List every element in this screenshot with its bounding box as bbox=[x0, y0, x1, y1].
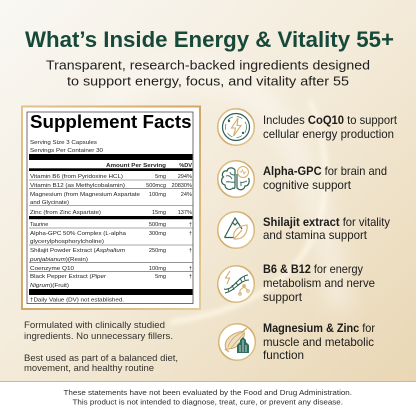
other ingredient rows: 300mg bbox=[149, 231, 166, 237]
nutrient rows: 500mcg bbox=[146, 183, 166, 189]
nutrient rows: 20830% bbox=[171, 183, 192, 189]
text: Shilajit: Shilajit extract for vitality bbox=[263, 216, 390, 229]
text: magnesium and zinc: function bbox=[263, 349, 304, 362]
panel: supplement facts bbox=[22, 106, 200, 309]
column header: Amount Per Serving bbox=[106, 163, 167, 169]
text: CoQ10: cellular energy production bbox=[263, 128, 394, 141]
nutrient rows: 100mg bbox=[149, 192, 166, 198]
other ingredient rows: 250mg bbox=[149, 248, 166, 254]
other ingredient rows bbox=[29, 222, 193, 289]
text: magnesium and zinc: muscle and metabolic bbox=[263, 336, 374, 349]
subtitle: to support energy, focus, and vitality after 55 bbox=[67, 74, 349, 88]
heading: supplement facts: Supplement Facts bbox=[30, 111, 192, 132]
other ingredient rows: 100mg bbox=[149, 266, 166, 272]
other ingredient rows: Alpha-GPC 50% Complex (L-alpha bbox=[30, 231, 127, 237]
note: usage bbox=[24, 353, 178, 373]
icon: dna and molecule bbox=[218, 266, 254, 302]
nutrient rows: 5mg bbox=[155, 174, 166, 180]
icon: muscle and mineral bbox=[219, 324, 255, 360]
text: Alpha-GPC: Alpha-GPC for brain and bbox=[263, 165, 387, 178]
title: What’s Inside Energy & Vitality 55+ bbox=[25, 27, 394, 52]
other ingredient rows: Coenzyme Q10 bbox=[30, 266, 74, 272]
other ingredient rows: Nigrum )(Fruit) bbox=[30, 283, 69, 289]
note: usage: Best used as part of a balanced diet, bbox=[24, 353, 178, 363]
note: formulation: Formulated with clinically studied bbox=[24, 320, 165, 330]
text: Shilajit bbox=[263, 216, 390, 242]
footer disclaimer: These statements have not been evaluated by the Food and Drug Administration. bbox=[64, 388, 352, 397]
serving information bbox=[30, 140, 103, 154]
nutrient rows: Vitamin B6 (from Pyridoxine HCL) bbox=[30, 174, 123, 180]
column header: %DV bbox=[179, 163, 192, 169]
nutrient rows bbox=[29, 174, 192, 216]
subtitle bbox=[46, 58, 370, 88]
text: B6 and B12: support bbox=[263, 291, 303, 304]
text: Alpha-GPC bbox=[263, 165, 387, 192]
icon: mountain and leaf bbox=[218, 212, 254, 248]
nutrient rows: 15mg bbox=[152, 210, 166, 216]
text: magnesium and zinc bbox=[263, 322, 375, 362]
footer disclaimer: This product is not intended to diagnose, treat, cure, or prevent any disease. bbox=[72, 398, 343, 406]
text: B6 and B12: B6 & B12 for energy bbox=[263, 263, 363, 276]
nutrient rows: 137% bbox=[178, 210, 192, 216]
note: formulation: ingredients. No unnecessary fillers. bbox=[24, 331, 173, 341]
footer disclaimer bbox=[0, 382, 416, 416]
other ingredient rows: † bbox=[189, 266, 192, 272]
text: magnesium and zinc: Magnesium & Zinc for bbox=[263, 322, 375, 335]
other ingredient rows: Shilajit Powder Extract ( Asphaltum bbox=[30, 248, 125, 254]
serving information: Servings Per Container 30 bbox=[30, 148, 103, 154]
column header bbox=[106, 163, 192, 169]
footnote: †Daily Value (DV) not established. bbox=[30, 298, 124, 304]
other ingredient rows: † bbox=[189, 274, 192, 280]
other ingredient rows: † bbox=[189, 222, 192, 228]
text: CoQ10: Includes CoQ10 to support bbox=[263, 114, 398, 127]
subtitle: Transparent, research-backed ingredients designed bbox=[46, 58, 370, 72]
nutrient rows: Magnesium (from Magnesium Aspartate bbox=[30, 192, 140, 198]
text: Alpha-GPC: cognitive support bbox=[263, 179, 352, 192]
other ingredient rows: punjabianum )(Resin) bbox=[29, 257, 88, 263]
text: B6 and B12 bbox=[263, 263, 375, 304]
nutrient rows: and Glycinate) bbox=[30, 200, 69, 206]
text: CoQ10 bbox=[263, 114, 398, 141]
nutrient rows: 24% bbox=[181, 192, 192, 198]
thick rule top bbox=[29, 154, 192, 160]
icon: energy cell bbox=[218, 109, 254, 145]
other ingredient rows: 5mg bbox=[155, 274, 166, 280]
nutrient rows: 294% bbox=[178, 174, 192, 180]
other ingredient rows: † bbox=[189, 248, 192, 254]
note: formulation bbox=[24, 320, 173, 341]
other ingredient rows: Taurine bbox=[30, 222, 48, 228]
serving information: Serving Size 3 Capsules bbox=[30, 140, 97, 146]
nutrient rows: Zinc (from Zinc Aspartate) bbox=[30, 210, 101, 216]
other ingredient rows: Black Pepper Extract ( Piper bbox=[30, 274, 107, 280]
icon: brain bbox=[218, 161, 254, 197]
nutrient rows: Vitamin B12 (as Methylcobalamin) bbox=[30, 183, 125, 189]
other ingredient rows: † bbox=[189, 231, 192, 237]
note: usage: movement, and healthy routine bbox=[24, 363, 154, 373]
text: Shilajit: and stamina support bbox=[263, 229, 368, 242]
label frame bbox=[27, 112, 193, 304]
other ingredient rows: glycerylphosphorylcholine) bbox=[30, 239, 104, 245]
text: B6 and B12: metabolism and nerve bbox=[263, 277, 375, 290]
other ingredient rows: 500mg bbox=[149, 222, 166, 228]
